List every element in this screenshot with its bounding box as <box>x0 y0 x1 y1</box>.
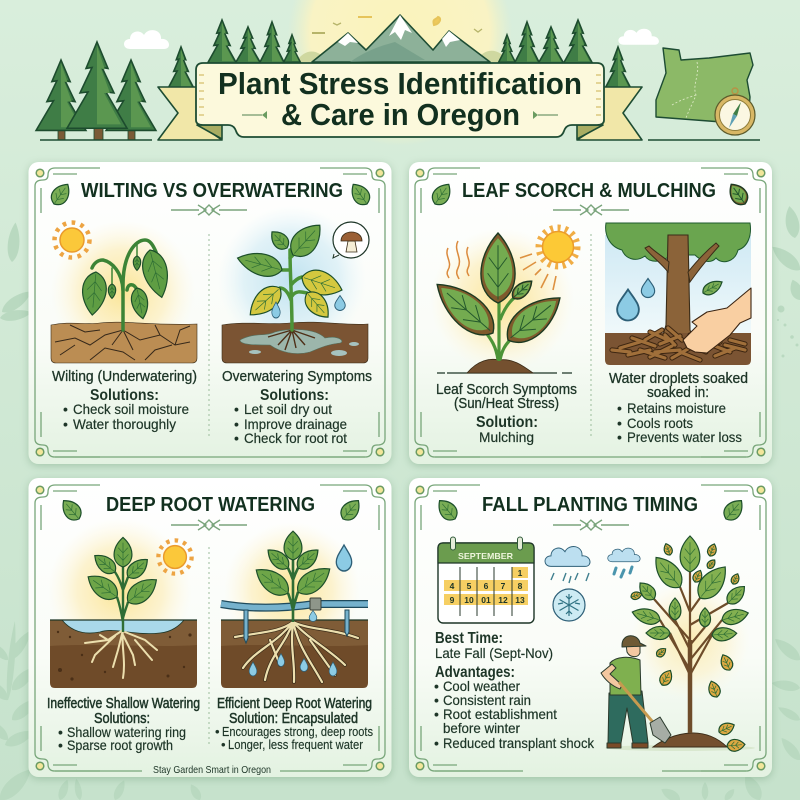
footer: Stay Garden Smart in Oregon <box>153 764 271 776</box>
mulching text block: Cools roots <box>627 415 693 431</box>
calendar: 10 <box>464 595 474 605</box>
scorch text block: (Sun/Heat Stress) <box>454 396 559 412</box>
deep text block: • <box>221 737 226 752</box>
timing text block: Advantages: <box>435 664 515 681</box>
timing text block: • <box>434 692 439 708</box>
icon: rain cloud small <box>608 548 640 577</box>
wilting text block: Check soil moisture <box>73 401 189 417</box>
deep text block: Efficient Deep Root Watering <box>217 696 372 712</box>
soil <box>221 620 368 688</box>
clouds <box>124 29 659 49</box>
heat waves <box>447 241 469 279</box>
title banner <box>196 63 604 137</box>
heading: LEAF SCORCH & MULCHING <box>462 179 716 202</box>
drip pipe <box>221 598 368 643</box>
soil <box>50 620 197 688</box>
overwatered plant <box>280 250 307 330</box>
wilting text block: • <box>63 416 68 432</box>
deep plant <box>288 558 298 622</box>
panel frame <box>415 485 766 771</box>
heading: FALL PLANTING TIMING <box>482 493 698 516</box>
deep text block: Longer, less frequent water <box>228 737 364 752</box>
icon: sun <box>158 540 192 574</box>
shallow roots <box>85 630 157 678</box>
overwatering text block: Improve drainage <box>244 416 347 432</box>
droplets <box>617 278 655 320</box>
mulching text block <box>609 371 748 445</box>
shallow text block: Shallow watering ring <box>67 724 186 740</box>
Oregon map <box>656 48 753 124</box>
mulching text block: Retains moisture <box>627 400 726 416</box>
cracked soil <box>51 322 197 363</box>
deep text block: Encourages strong, deep roots <box>222 724 373 739</box>
icon: heading leaves <box>434 496 747 524</box>
panel frame <box>35 485 385 771</box>
decorative foliage <box>0 205 800 800</box>
deep roots <box>235 622 358 682</box>
sun glow <box>288 0 512 146</box>
gardener with shovel <box>601 636 671 748</box>
heading: WILTING VS OVERWATERING <box>81 179 343 202</box>
shallow text block: • <box>58 737 63 753</box>
calendar: 9 <box>450 595 455 605</box>
panel: fall planting timing <box>409 478 772 777</box>
header illustration <box>36 0 760 146</box>
shallow text block: • <box>58 724 63 740</box>
mulching illustration <box>605 223 751 365</box>
icon: hand <box>683 288 751 353</box>
scorched plant <box>484 298 514 361</box>
mulching text block: soaked in: <box>647 385 709 401</box>
droplets <box>249 545 352 676</box>
icon: snowflake <box>553 589 585 621</box>
wilting text block: Solutions: <box>90 387 159 404</box>
timing text block: Consistent rain <box>443 692 531 708</box>
icon: heading leaves <box>58 496 364 524</box>
wilting text block <box>52 369 197 432</box>
mound and ground <box>437 372 572 374</box>
timing text block <box>434 630 595 751</box>
right-edge and upper trees <box>208 20 631 88</box>
mulching text block: • <box>617 400 622 416</box>
timing text block: Reduced transplant shock <box>443 735 595 751</box>
wilting text block: Water thoroughly <box>73 416 176 432</box>
droplets <box>272 296 345 318</box>
mulching text block: Prevents water loss <box>627 429 742 445</box>
overwatering text block: Check for root rot <box>244 430 347 446</box>
timing text block: • <box>434 735 439 751</box>
tree trunk <box>663 235 692 335</box>
shallow watering illustration <box>48 518 197 688</box>
timing text block: before winter <box>443 720 520 736</box>
title text: Plant Stress Identification <box>218 66 582 101</box>
deep text block: Solution: Encapsulated <box>229 711 358 727</box>
scorch text block: Mulching <box>479 429 534 445</box>
leaf scorch illustration <box>427 228 577 373</box>
wilting text block: Wilting (Underwatering) <box>52 369 197 385</box>
timing text block: Root establishment <box>443 706 557 722</box>
timing text block: Best Time: <box>435 630 503 647</box>
wilting illustration <box>51 220 197 364</box>
shallow plant <box>115 565 128 632</box>
timing text block: • <box>434 706 439 722</box>
ribbon <box>158 87 642 140</box>
calendar: 12 <box>498 595 508 605</box>
shallow text block: Ineffective Shallow Watering <box>47 696 200 712</box>
calendar: 01 <box>481 595 491 605</box>
timing text block: Late Fall (Sept-Nov) <box>435 645 553 661</box>
overwatering text block: Overwatering Symptoms <box>222 369 372 385</box>
timing text block: • <box>434 678 439 694</box>
shallow text block: Solutions: <box>94 711 150 727</box>
calendar: 13 <box>515 595 525 605</box>
title banner: & Care in Oregon <box>281 97 520 132</box>
calendar: SEPTEMBER <box>458 551 513 561</box>
scorch text block: Solution: <box>476 414 538 431</box>
left trees <box>36 42 194 140</box>
scorch text block: Leaf Scorch Symptoms <box>436 382 577 398</box>
falling leaves <box>630 542 745 752</box>
mulching text block: Water droplets soaked <box>609 371 748 387</box>
wilted plant <box>92 240 156 330</box>
heading: DEEP ROOT WATERING <box>106 493 315 516</box>
panel: leaf scorch and mulching <box>409 162 772 464</box>
calendar: 7 <box>501 581 506 591</box>
shallow text block: Sparse root growth <box>67 737 173 753</box>
mulch soil <box>605 333 751 365</box>
deep text block: • <box>215 724 220 739</box>
overwatering text block: Solutions: <box>260 387 329 404</box>
deep text block <box>215 696 373 752</box>
mulching text block: • <box>617 429 622 445</box>
overwatering text block: • <box>234 430 239 446</box>
overwatering text block: Let soil dry out <box>244 401 332 417</box>
calendar <box>438 537 534 623</box>
shallow text block <box>47 696 200 753</box>
timing text block: Cool weather <box>443 678 520 694</box>
panel frame <box>35 168 385 457</box>
sapling tree <box>605 536 755 752</box>
scorch text block <box>436 382 577 445</box>
calendar: 5 <box>467 581 472 591</box>
icon: sun <box>54 222 90 258</box>
calendar: 4 <box>450 581 455 591</box>
overwatering text block: • <box>234 401 239 417</box>
tree canopy <box>606 223 750 262</box>
icon: mushroom bubble <box>333 222 369 258</box>
icon: large sun <box>539 228 577 266</box>
panel frame <box>415 168 766 457</box>
overwatering text block <box>222 369 372 446</box>
icon: heading leaves <box>48 180 373 209</box>
ground lines <box>40 139 760 141</box>
overwatering text block: • <box>234 416 239 432</box>
panel: deep root watering <box>28 478 392 777</box>
mountains <box>296 15 508 62</box>
overwatering illustration <box>218 206 369 363</box>
calendar: 8 <box>518 581 523 591</box>
mulching text block: • <box>617 415 622 431</box>
compass <box>715 88 755 135</box>
deep root illustration <box>221 522 368 688</box>
calendar: 6 <box>484 581 489 591</box>
wilting text block: • <box>63 401 68 417</box>
icon: heading leaves <box>429 180 751 209</box>
waterlogged soil <box>222 322 368 363</box>
birds and small clouds <box>312 23 482 33</box>
panel: wilting vs overwatering <box>28 162 392 464</box>
icon: rain cloud large <box>545 547 590 583</box>
calendar: 1 <box>518 568 523 578</box>
